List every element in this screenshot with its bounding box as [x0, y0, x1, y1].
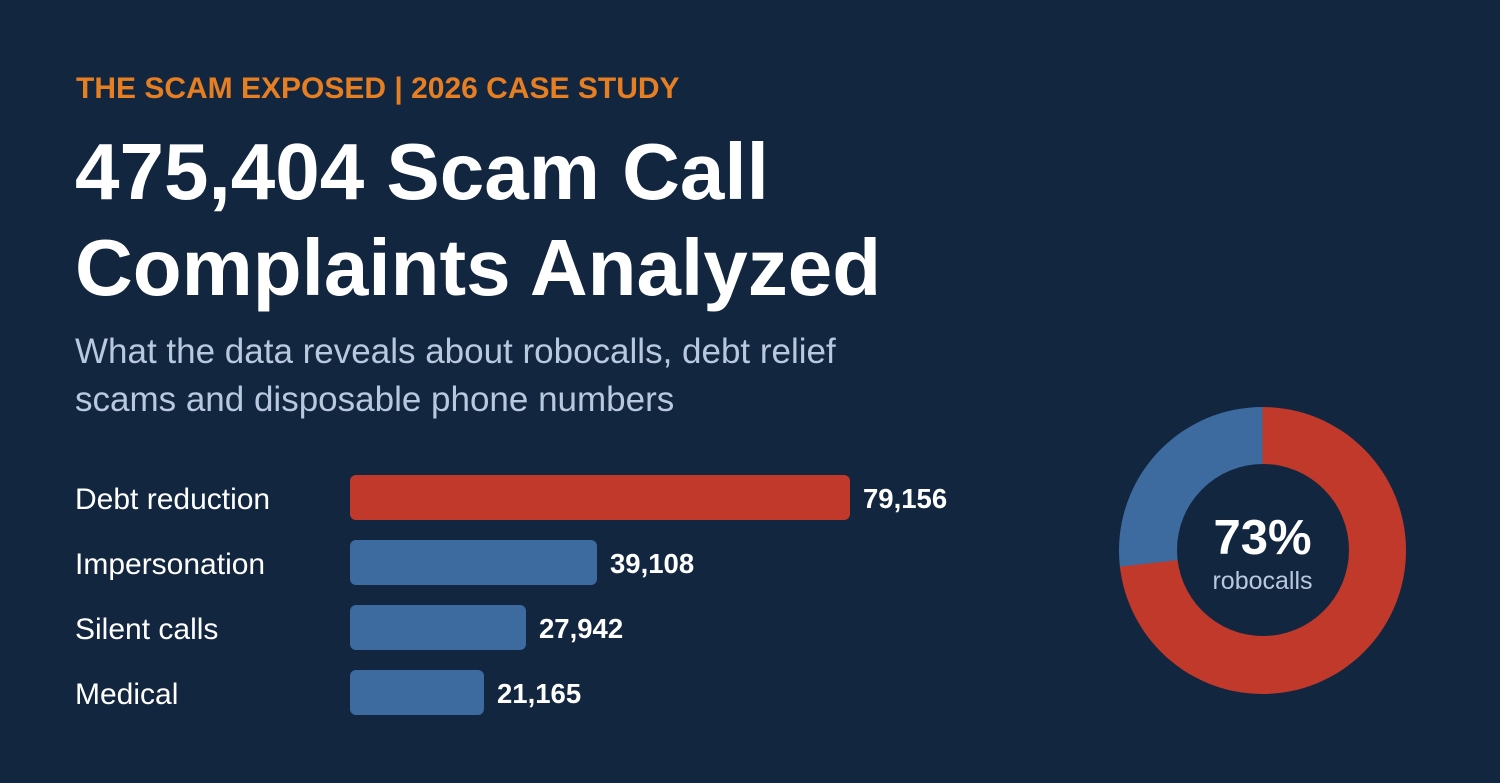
- row: silent calls: Silent calls: [75, 613, 218, 646]
- row: silent calls: 27,942: [539, 613, 623, 644]
- title: 475,404 Scam Call: [75, 127, 769, 216]
- donut chart: 73% robocalls: [1119, 406, 1406, 694]
- subtitle: scams and disposable phone numbers: [75, 380, 674, 419]
- bar chart: [75, 475, 947, 715]
- subtitle: [75, 332, 836, 419]
- title: Complaints Analyzed: [75, 223, 881, 312]
- row: debt reduction: Debt reduction: [75, 483, 270, 516]
- percent caption: robocalls: [1212, 567, 1313, 595]
- row: impersonation: [75, 540, 694, 585]
- row: impersonation: 39,108: [610, 548, 694, 579]
- row: medical: [75, 670, 581, 715]
- subtitle: What the data reveals about robocalls, debt relief: [75, 332, 836, 371]
- title: [75, 127, 881, 312]
- row: medical: 21,165: [497, 678, 581, 709]
- row: silent calls: [75, 605, 623, 650]
- row: debt reduction: 79,156: [863, 483, 947, 514]
- percent value: 73%: [1213, 511, 1312, 565]
- eyebrow heading: THE SCAM EXPOSED | 2026 CASE STUDY: [76, 72, 680, 105]
- donut center label: [1176, 464, 1348, 636]
- row: medical: Medical: [75, 678, 178, 711]
- row: impersonation: Impersonation: [75, 548, 265, 581]
- row: debt reduction: [75, 475, 947, 520]
